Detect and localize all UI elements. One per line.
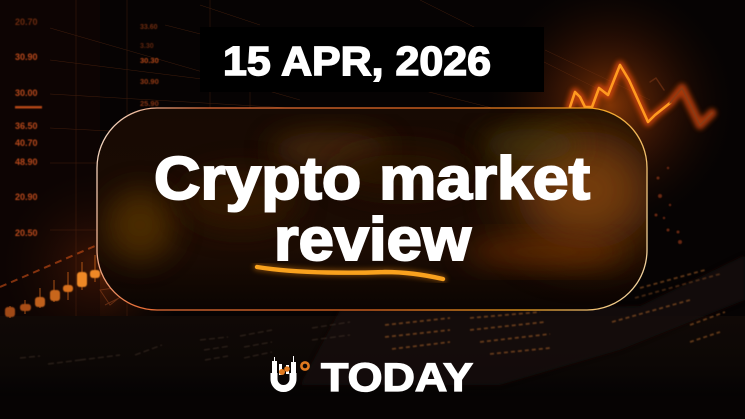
axis price labels: 30.90 xyxy=(140,77,159,86)
chart grid lines xyxy=(50,0,650,320)
panel: headline card xyxy=(97,108,655,310)
axis price labels: 25.90 xyxy=(140,99,159,108)
candlestick chart xyxy=(0,246,100,318)
axis price labels: 33.60 xyxy=(140,24,158,31)
axis price labels: 48.90 xyxy=(15,157,38,167)
axis price labels: 20.90 xyxy=(15,192,38,202)
axis price labels: 40.70 xyxy=(15,138,38,148)
vertical glow dots xyxy=(654,167,682,244)
trading keyboard xyxy=(0,255,745,396)
underline swoosh xyxy=(257,267,443,279)
axis price labels: 20.70 xyxy=(15,17,38,27)
axis price labels: 20.50 xyxy=(15,228,38,238)
axis price labels: 30.90 xyxy=(15,52,38,62)
date text: 15 APR, 2026 xyxy=(223,38,491,84)
logo wordmark: TODAY xyxy=(321,356,473,400)
axis price labels: 36.50 xyxy=(15,121,38,131)
heading: Crypto market: Crypto market xyxy=(154,145,590,212)
axis price labels: 3.30 xyxy=(140,43,154,50)
axis price labels: 30.30 xyxy=(140,56,159,65)
logo: U.Today xyxy=(272,356,473,400)
axis price labels: 30.00 xyxy=(15,88,38,98)
panel border xyxy=(97,108,647,310)
date box xyxy=(200,27,544,92)
axis price labels xyxy=(15,17,159,238)
panel inner blurred glow xyxy=(105,129,655,266)
glowing price line xyxy=(570,65,712,125)
icon: U with candlesticks xyxy=(272,356,309,388)
heading: review: review xyxy=(274,206,471,273)
